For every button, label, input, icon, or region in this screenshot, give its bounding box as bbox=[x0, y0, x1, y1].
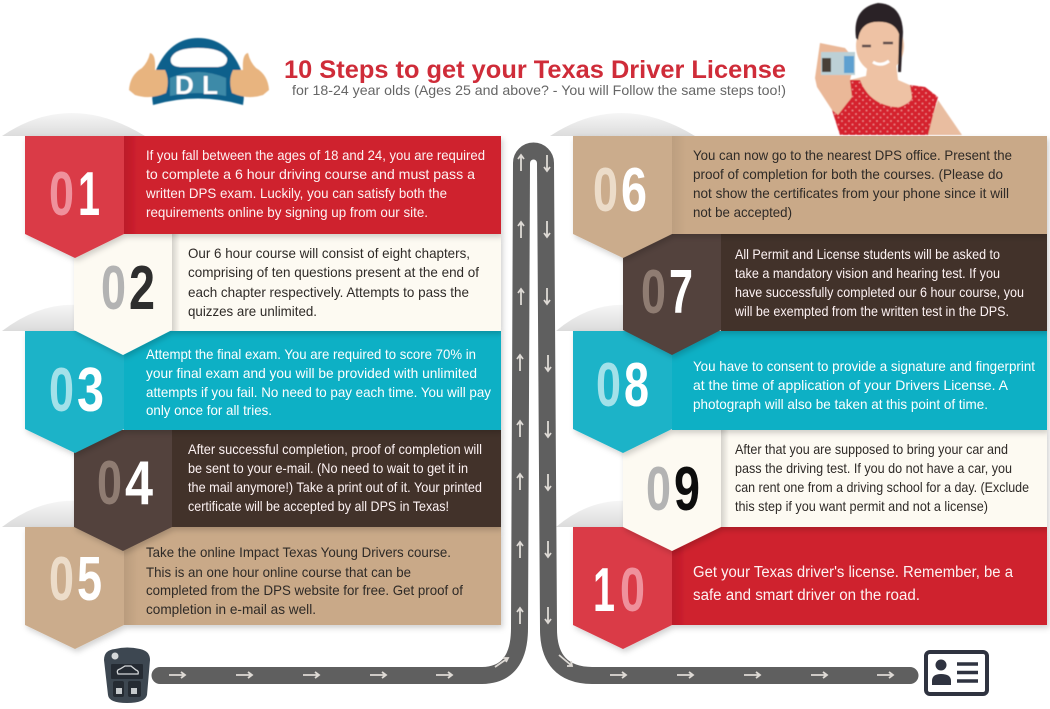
panel: step 2: Our 6 hour course will consist of eight chapters, bbox=[188, 245, 470, 261]
panel: step 9: 0 bbox=[646, 455, 671, 524]
panel: step 5: This is an one hour online course that can be bbox=[146, 564, 411, 580]
panel: step 9: pass the driving test. If you do not have a car, you bbox=[735, 460, 1012, 476]
panel: step 1: 1 bbox=[78, 160, 100, 229]
panel: step 2: comprising of ten questions present at the end of bbox=[188, 264, 479, 280]
panel: step 5: completed from the DPS website for free. Get proof of bbox=[146, 582, 463, 598]
panel: step 4: certificate will be accepted by all DPS in Texas! bbox=[188, 498, 449, 514]
panel: step 2: 2 bbox=[129, 254, 155, 323]
panel: step 2 bbox=[74, 234, 501, 355]
panel: step 4 bbox=[74, 430, 501, 551]
logo letters: DL bbox=[175, 70, 218, 100]
panel: step 9: 9 bbox=[674, 455, 700, 524]
subtitle: for 18-24 year olds (Ages 25 and above? - You will Follow the same steps too!) bbox=[292, 82, 786, 98]
title: 10 Steps to get your Texas Driver License bbox=[284, 56, 786, 84]
right thumb bbox=[230, 53, 269, 97]
panel: step 8: 8 bbox=[624, 351, 649, 420]
panel: step 10: safe and smart driver on the road. bbox=[693, 587, 920, 604]
panel: step 2: each chapter respectively. Attempts to pass the bbox=[188, 284, 469, 300]
panel: step 1: 0 bbox=[49, 160, 74, 229]
panel: step 7: 0 bbox=[641, 258, 666, 327]
panel: step 1: written DPS exam. Luckily, you can satisfy both the bbox=[145, 185, 447, 201]
panel: step 6 bbox=[573, 136, 1047, 258]
panel: step 8: 0 bbox=[596, 351, 621, 420]
panel: step 5: 0 bbox=[49, 545, 74, 614]
panel: step 2: quizzes are unlimited. bbox=[188, 303, 317, 319]
panel: step 8: photograph will also be taken at this point of time. bbox=[693, 396, 988, 412]
panel: step 7: 7 bbox=[669, 258, 693, 327]
panel: step 6: You can now go to the nearest DPS office. Present the bbox=[693, 147, 1012, 163]
road arrows bbox=[169, 155, 893, 678]
panel: step 5: completion in e-mail as well. bbox=[146, 601, 316, 617]
panel: step 7: have successfully completed our 6 hour course, you bbox=[735, 284, 1024, 300]
panel: step 3: attempts if you fail. No need to pay each time. You will pay bbox=[146, 384, 491, 400]
panel: step 1 bbox=[25, 136, 501, 258]
woman holding license card bbox=[815, 3, 962, 135]
panel: step 6: 0 bbox=[593, 156, 618, 225]
panel: step 1: If you fall between the ages of 18 and 24, you are required bbox=[146, 147, 485, 163]
panel: step 4: After successful completion, proof of completion will bbox=[188, 441, 482, 457]
logo: steering wheel with thumbs up bbox=[129, 38, 269, 105]
panel: step 2: 0 bbox=[101, 254, 126, 323]
panel: step 10: 0 bbox=[620, 556, 645, 625]
panel: step 7: will be exempted from the written test in the DPS. bbox=[734, 303, 1009, 319]
panel: step 8: at the time of application of your Drivers License. A bbox=[693, 377, 1009, 393]
panel: step 1: to complete a 6 hour driving course and must pass a bbox=[146, 166, 475, 182]
panel: step 5: 5 bbox=[77, 545, 102, 614]
panel: step 9: After that you are supposed to bring your car and bbox=[735, 441, 1008, 457]
panel: step 7: take a mandatory vision and hearing test. If you bbox=[735, 265, 1000, 281]
panel: step 5 bbox=[25, 527, 501, 649]
panel: step 9: this step if you want permit and not a license) bbox=[735, 498, 988, 514]
panel: step 1: requirements online by signing up from our site. bbox=[146, 204, 428, 220]
panel: step 3: Attempt the final exam. You are required to score 70% in bbox=[146, 346, 476, 362]
panel: step 10: 1 bbox=[593, 556, 615, 625]
panel: step 4: 0 bbox=[97, 449, 122, 518]
panel: step 3: 3 bbox=[77, 356, 104, 425]
panel: step 4: 4 bbox=[125, 449, 153, 518]
road surface: from key to U-turn to license bbox=[160, 151, 910, 676]
panel: step 6: proof of completion for both the courses. (Please do bbox=[693, 166, 1003, 182]
panel: step 8: You have to consent to provide a signature and fingerprint bbox=[693, 358, 1035, 374]
panel: step 9 bbox=[623, 430, 1047, 551]
panel: step 10: Get your Texas driver's license. Remember, be a bbox=[693, 564, 1013, 581]
panel: step 4: the mail anymore!) Take a print out of it. Your printed bbox=[188, 479, 482, 495]
panel: step 3: 0 bbox=[49, 356, 74, 425]
icon: car key fob bbox=[104, 648, 150, 703]
face bbox=[856, 19, 904, 73]
hair bbox=[855, 3, 903, 72]
panel: step 6: not be accepted) bbox=[693, 204, 792, 220]
panel: step 6: 6 bbox=[621, 156, 647, 225]
panel: step 4: be sent to your e-mail. (No need to wait to get it in bbox=[188, 460, 468, 476]
panel: step 3 bbox=[25, 331, 501, 453]
panel: step 5: Take the online Impact Texas Young Drivers course. bbox=[146, 544, 451, 560]
license card bbox=[821, 52, 855, 75]
panel: step 6: not show the certificates from your phone since it will bbox=[693, 185, 1009, 201]
road bbox=[160, 151, 910, 678]
panel: step 7: All Permit and License students will be asked to bbox=[735, 246, 1000, 262]
panel: step 7 bbox=[623, 234, 1047, 355]
panel: step 3: your final exam and you will be provided with unlimited bbox=[146, 365, 477, 381]
panel: step 8 bbox=[573, 331, 1047, 453]
shadow arcs behind steps bbox=[2, 113, 695, 527]
icon: license ID card bbox=[926, 652, 987, 694]
panel: step 3: only once for all tries. bbox=[146, 402, 272, 418]
panel: step 10 bbox=[573, 527, 1047, 649]
left thumb bbox=[129, 53, 168, 97]
